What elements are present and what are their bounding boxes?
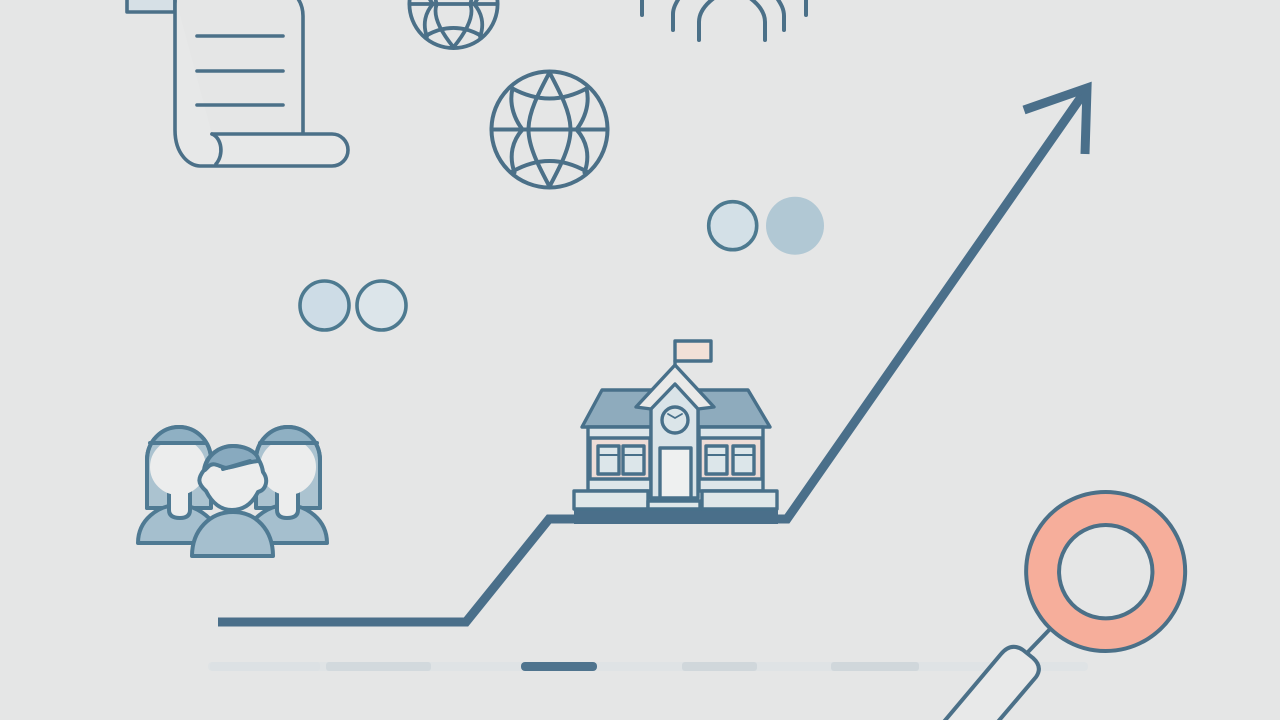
icon: group of people <box>138 427 327 556</box>
handle <box>942 647 1039 720</box>
stem <box>1026 627 1052 654</box>
centre person <box>192 446 273 556</box>
clock <box>662 407 688 433</box>
icon: school building <box>574 341 777 509</box>
wings <box>588 427 763 491</box>
door <box>660 448 691 498</box>
gable <box>636 365 714 409</box>
tower <box>651 383 698 498</box>
icon: signal arcs <box>642 0 806 40</box>
left person <box>138 427 222 543</box>
roofs <box>582 390 770 427</box>
circle pair left <box>300 281 406 330</box>
progress track <box>208 662 1088 671</box>
windows <box>598 446 754 474</box>
icon: scroll document <box>127 0 348 166</box>
circle pair right <box>709 197 824 255</box>
steps <box>574 491 777 509</box>
flag <box>675 341 711 366</box>
lens <box>1026 492 1185 651</box>
icon: magnifying glass <box>942 492 1185 720</box>
right person <box>243 427 327 543</box>
growth line with arrow <box>218 88 1087 622</box>
icon: globe <box>492 72 608 188</box>
icon: partial globe <box>409 0 498 48</box>
